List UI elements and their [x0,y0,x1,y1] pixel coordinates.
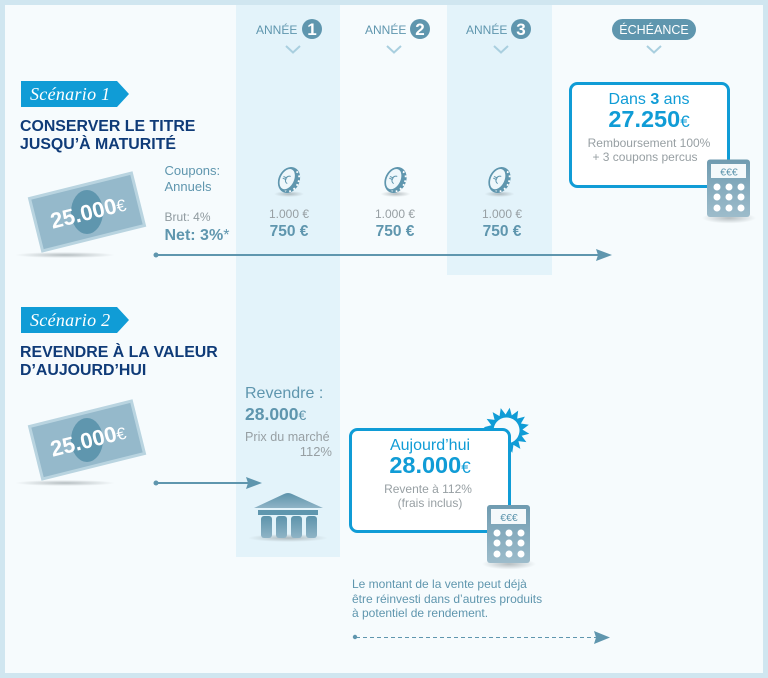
scenario 2 heading [20,342,218,379]
arrow: dashed reinvestment [353,631,610,644]
callout: maturity result: Remboursement 100% [588,136,711,150]
header: maturity [612,19,696,52]
coupon details: Net: 3%* [164,227,229,244]
scenario 2 heading: REVENDRE À LA VALEUR [20,342,218,361]
header: year 1: ANNÉE [256,22,297,37]
scenario 1 heading: CONSERVER LE TITRE [20,118,195,135]
header: year 3: 3 [516,20,526,39]
coupon details: Brut: 4% [164,210,211,224]
icon: bank [248,493,328,542]
banknote 2: 25.000€ [48,419,129,462]
icon: calculator 2 [482,505,536,570]
header: year 3 [466,19,531,52]
reinvestment note: à potentiel de rendement. [352,606,488,620]
reinvestment note: être réinvesti dans d’autres produits [352,592,542,606]
scenario 2 tag [21,307,129,333]
banknote 1: 25.000€ [48,191,129,234]
banknote 2 [15,399,146,486]
callout: today result: Aujourd’hui [390,437,470,454]
header: year 1 [256,19,322,52]
scenario 1 tag [21,81,129,107]
coupon details [164,163,229,244]
resale text: Prix du marché [245,430,330,444]
scenario 1 heading [20,118,195,153]
column: year 3 band [447,5,552,275]
arrow: scenario 2 to sale [154,477,262,489]
icon: calculator 1 [702,160,756,224]
scenario 2 heading: D’AUJOURD’HUI [20,362,146,379]
banknote 1 [15,171,146,258]
coin year 3 [484,163,515,197]
coupon details: Annuels [164,179,212,194]
reinvestment note: Le montant de la vente peut déjà [352,577,527,591]
coin year 2 [380,163,411,197]
icon: calculator 2: €€€ [500,512,518,524]
header: year 2 [365,19,430,52]
resale text: 28.000€ [245,404,307,424]
column: year 1 band [236,5,340,557]
coupon amounts year 2: 1.000 € [375,207,415,221]
coupon amounts year 1: 750 € [270,223,309,240]
coupon amounts year 3: 750 € [483,223,522,240]
coupon amounts year 3 [482,207,522,240]
resale text: Revendre : [245,385,323,402]
coupon amounts year 2 [375,207,415,240]
callout: maturity result: Dans 3 ans [609,91,689,108]
callout: today result: (frais inclus) [398,496,462,510]
callout: today result: 28.000€ [389,452,471,478]
scenario 2 tag: Scénario 2 [30,310,110,330]
reinvestment note [352,577,542,620]
scenario 1 heading: JUSQU’À MATURITÉ [20,134,176,153]
coupon amounts year 1 [269,207,309,240]
coupon amounts year 2: 750 € [376,223,415,240]
callout: maturity result: + 3 coupons percus [592,150,698,164]
header: year 2: 2 [415,20,425,39]
coupon amounts year 1: 1.000 € [269,207,309,221]
icon: starburst [481,405,532,456]
header: year 2: ANNÉE [365,22,406,37]
resale text: 112% [300,444,332,459]
header: year 1: 1 [307,20,317,39]
icon: calculator 1: €€€ [720,166,738,178]
scenario 1 tag: Scénario 1 [30,84,110,104]
coin year 1 [274,163,304,197]
coupon details: Coupons: [164,163,220,178]
coupon amounts year 3: 1.000 € [482,207,522,221]
arrow: scenario 1 timeline [154,249,612,261]
resale text [245,385,332,459]
header: maturity: ÉCHÉANCE [619,22,689,37]
callout: today result [350,430,510,532]
callout: maturity result [570,84,728,186]
callout: today result: Revente à 112% [384,482,472,496]
header: year 3: ANNÉE [466,22,507,37]
callout: maturity result: 27.250€ [608,106,690,132]
